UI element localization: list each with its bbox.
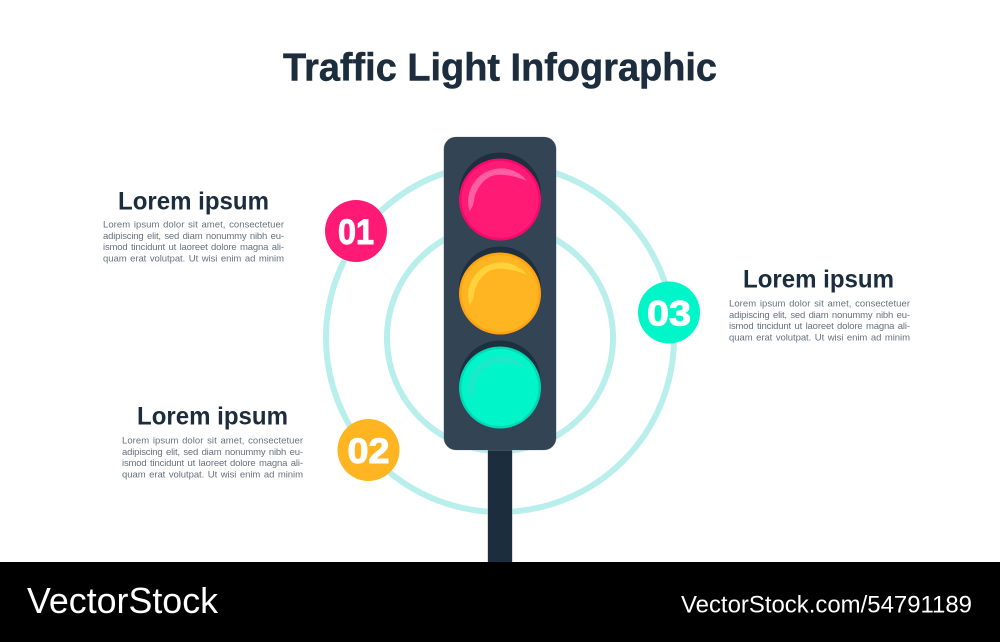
traffic light pole [488, 448, 512, 564]
text block 03 [729, 266, 910, 344]
text block 03: quam erat volutpat. Ut wisi enim ad minim [729, 332, 910, 344]
text block 03: Lorem ipsum dolor sit amet, consectetuer [729, 298, 910, 310]
concentric rings [326, 164, 674, 512]
traffic light [444, 137, 556, 450]
footer bar [0, 562, 1000, 642]
badge 03 [638, 282, 700, 344]
badge 01: 01 [338, 213, 374, 252]
text block 01: Lorem ipsum [118, 188, 269, 216]
text block 02: adipiscing elit, sed diam nonummy nibh eu- [122, 447, 303, 458]
text block 01: adipiscing elit, sed diam nonummy nibh eu- [103, 231, 284, 242]
yellow light [459, 246, 541, 334]
text block 02: quam erat volutpat. Ut wisi enim ad minim [122, 470, 303, 480]
title: Traffic Light Infographic [283, 46, 717, 90]
text block 01: quam erat volutpat. Ut wisi enim ad minim [103, 254, 284, 264]
badge 02 [338, 419, 400, 481]
text block 03: Lorem ipsum [743, 266, 894, 294]
badge 01 [325, 200, 387, 262]
text block 01: Lorem ipsum dolor sit amet, consectetuer [103, 220, 284, 230]
footer brand: VectorStock [27, 580, 219, 621]
badge 02: 02 [348, 432, 390, 471]
red light [459, 152, 541, 240]
text block 03: ismod tincidunt ut laoreet dolore magna ali- [729, 321, 910, 332]
text block 02: Lorem ipsum dolor sit amet, consectetuer [122, 436, 303, 446]
housing [444, 137, 556, 450]
badge 03: 03 [647, 294, 691, 334]
text block 01 [103, 188, 284, 264]
text block 02 [122, 402, 303, 480]
text block 01: ismod tincidunt ut laoreet dolore magna ali- [103, 242, 284, 253]
text block 02: Lorem ipsum [137, 402, 288, 430]
green light [459, 340, 541, 428]
text block 02: ismod tincidunt ut laoreet dolore magna ali- [122, 458, 303, 469]
text block 03: adipiscing elit, sed diam nonummy nibh eu- [729, 310, 910, 321]
footer image id: VectorStock.com/54791189 [681, 592, 972, 618]
